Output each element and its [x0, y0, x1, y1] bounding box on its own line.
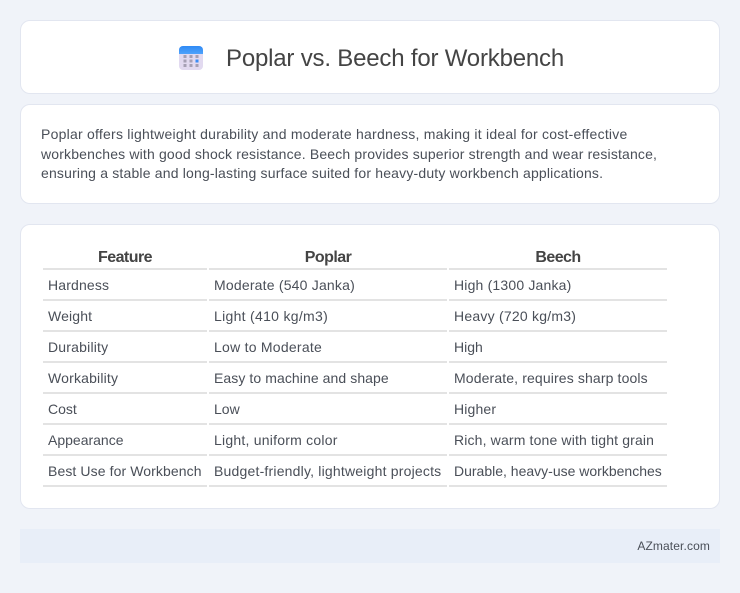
row: best use: Budget-friendly, lightweight projects	[214, 463, 441, 479]
row: cost	[48, 401, 496, 417]
row: weight: Weight	[48, 308, 92, 324]
row: durability: High	[454, 339, 483, 355]
intro text panel	[20, 104, 720, 204]
row: best use: Best Use for Workbench	[48, 463, 202, 479]
row: hardness: High (1300 Janka)	[454, 277, 571, 293]
row: workability: Easy to machine and shape	[214, 370, 389, 386]
column headers	[98, 249, 581, 266]
title: Poplar vs. Beech for Workbench	[226, 45, 564, 72]
row: appearance	[48, 432, 654, 448]
row: appearance: Rich, warm tone with tight grain	[454, 432, 654, 448]
row: hardness	[48, 277, 571, 293]
row: appearance: Light, uniform color	[214, 432, 338, 448]
row: best use	[48, 463, 662, 479]
intro paragraph	[41, 126, 657, 181]
row: durability: Durability	[48, 339, 108, 355]
row: durability: Low to Moderate	[214, 339, 322, 355]
intro paragraph: Poplar offers lightweight durability and moderate hardness, making it ideal for cost-effective	[41, 126, 628, 142]
row: weight: Heavy (720 kg/m3)	[454, 308, 576, 324]
row: workability: Workability	[48, 370, 118, 386]
row: weight	[48, 308, 576, 324]
footer credit: AZmater.com	[637, 539, 710, 553]
row: workability: Moderate, requires sharp tools	[454, 370, 648, 386]
row: durability	[48, 339, 483, 355]
row: appearance: Appearance	[48, 432, 124, 448]
row: hardness: Moderate (540 Janka)	[214, 277, 355, 293]
row: cost: Cost	[48, 401, 77, 417]
icon: calendar	[179, 46, 203, 70]
row: best use: Durable, heavy-use workbenches	[454, 463, 662, 479]
row: workability	[48, 370, 648, 386]
row: cost: Higher	[454, 401, 496, 417]
column headers: Poplar	[305, 249, 351, 266]
column headers: Beech	[535, 249, 581, 266]
intro paragraph: workbenches with good shock resistance. Beech provides superior strength and wear resistance,	[41, 146, 657, 162]
intro paragraph: ensuring a stable and long-lasting surface suited for heavy-duty workbench applications.	[41, 165, 603, 181]
row: weight: Light (410 kg/m3)	[214, 308, 328, 324]
column headers: Feature	[98, 249, 152, 266]
row: cost: Low	[214, 401, 240, 417]
header panel	[20, 20, 720, 94]
footer bar	[20, 529, 720, 563]
row: hardness: Hardness	[48, 277, 109, 293]
comparison table panel	[20, 224, 720, 509]
